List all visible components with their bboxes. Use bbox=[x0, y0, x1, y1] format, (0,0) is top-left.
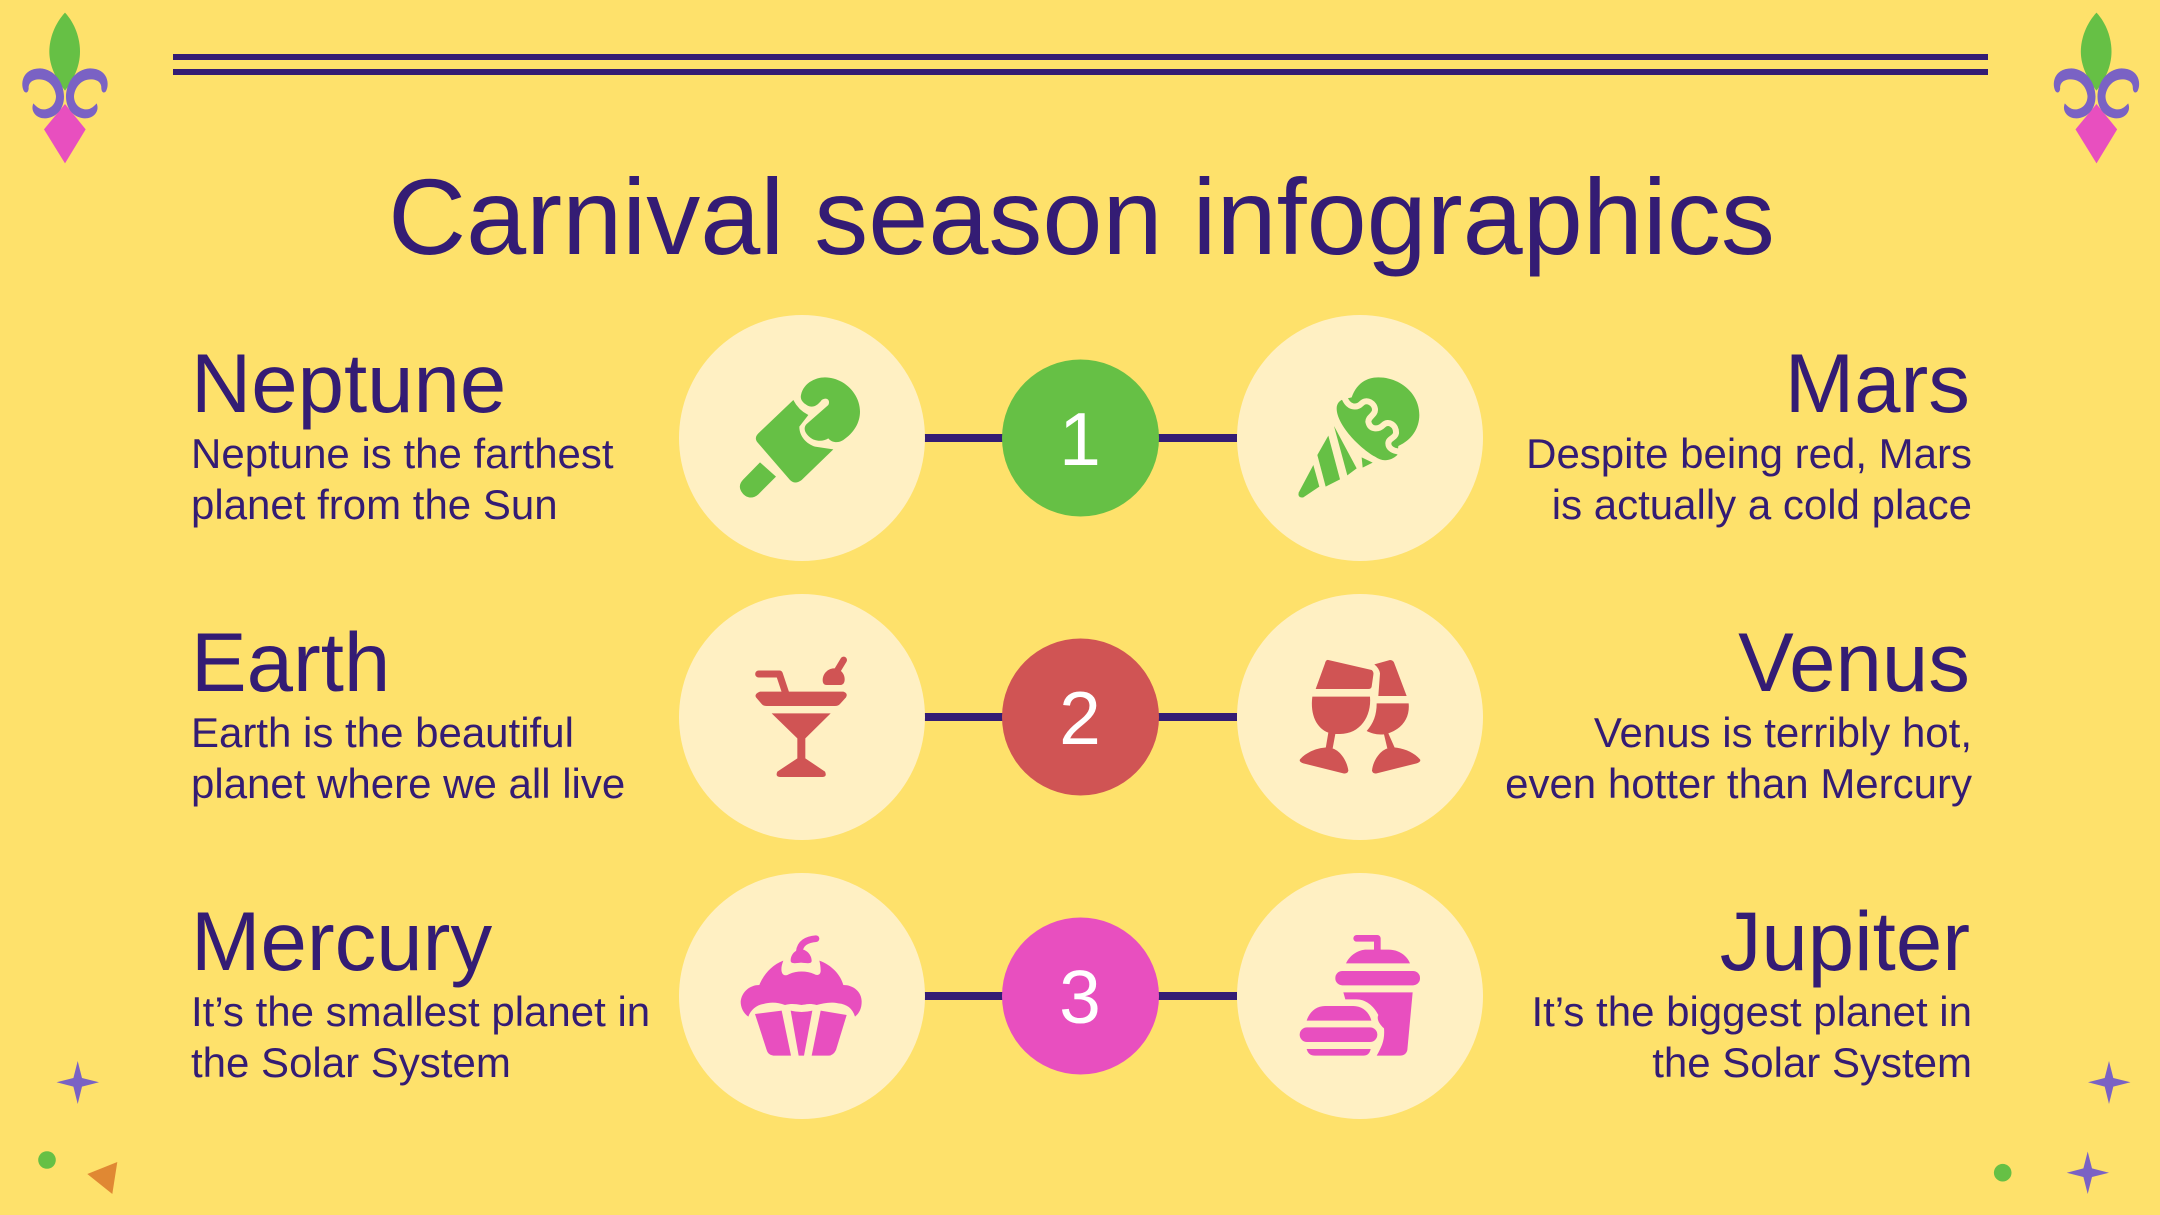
number badge 3: 3 bbox=[1059, 955, 1101, 1039]
icon: ice cream cone bbox=[1237, 315, 1483, 561]
description: Earth: Earth is the beautiful bbox=[191, 709, 574, 756]
description: Earth: planet where we all live bbox=[191, 760, 625, 807]
heading: Mars: Mars bbox=[1785, 337, 1970, 430]
panel: Mars text bbox=[1526, 337, 1972, 528]
icon: fleur-de-lis left bbox=[22, 13, 108, 163]
icon: fleur-de-lis right bbox=[2054, 13, 2139, 163]
decorative triangle bottom left bbox=[87, 1162, 117, 1194]
heading: Mercury: Mercury bbox=[191, 895, 492, 988]
title: Carnival season infographics bbox=[388, 156, 1775, 277]
description: Venus: even hotter than Mercury bbox=[1505, 760, 1972, 807]
number badge 1 bbox=[1002, 360, 1159, 516]
decorative dot bottom left bbox=[38, 1151, 56, 1169]
heading: Jupiter: Jupiter bbox=[1720, 895, 1970, 988]
panel: Jupiter text bbox=[1531, 895, 1972, 1086]
icon: cupcake bbox=[679, 873, 925, 1119]
icon: cocktail glass bbox=[679, 594, 925, 840]
decorative star bottom right upper bbox=[2088, 1061, 2130, 1104]
icon: wine glasses bbox=[1237, 594, 1483, 840]
icon: popsicle bbox=[679, 315, 925, 561]
description: Venus: Venus is terribly hot, bbox=[1594, 709, 1972, 756]
connector line row 3 bbox=[924, 992, 1237, 1000]
panel: Neptune text bbox=[191, 337, 614, 528]
panel: Earth text bbox=[191, 616, 625, 807]
number badge 2 bbox=[1002, 638, 1159, 796]
heading: Venus: Venus bbox=[1738, 616, 1970, 709]
decorative star bottom left bbox=[56, 1061, 99, 1104]
description: Jupiter: the Solar System bbox=[1652, 1039, 1972, 1086]
decorative star bottom right lower bbox=[2067, 1152, 2109, 1194]
description: Mercury: It’s the smallest planet in bbox=[191, 988, 650, 1035]
description: Mars: is actually a cold place bbox=[1552, 481, 1972, 528]
description: Jupiter: It’s the biggest planet in bbox=[1531, 988, 1972, 1035]
panel: Venus text bbox=[1505, 616, 1972, 807]
heading: Neptune: Neptune bbox=[191, 337, 506, 430]
description: Mercury: the Solar System bbox=[191, 1039, 511, 1086]
decorative dot bottom right bbox=[1994, 1164, 2011, 1181]
panel: Mercury text bbox=[191, 895, 650, 1086]
description: Neptune: planet from the Sun bbox=[191, 481, 558, 528]
connector line row 2 bbox=[924, 713, 1237, 721]
number badge 3 bbox=[1002, 918, 1159, 1074]
description: Mars: Despite being red, Mars bbox=[1526, 430, 1972, 477]
connector line row 1 bbox=[924, 434, 1237, 442]
icon: drink and burger bbox=[1237, 873, 1483, 1119]
number badge 1: 1 bbox=[1059, 397, 1101, 481]
number badge 2: 2 bbox=[1059, 676, 1101, 760]
top double rule bbox=[173, 54, 1988, 75]
heading: Earth: Earth bbox=[191, 616, 390, 709]
description: Neptune: Neptune is the farthest bbox=[191, 430, 614, 477]
